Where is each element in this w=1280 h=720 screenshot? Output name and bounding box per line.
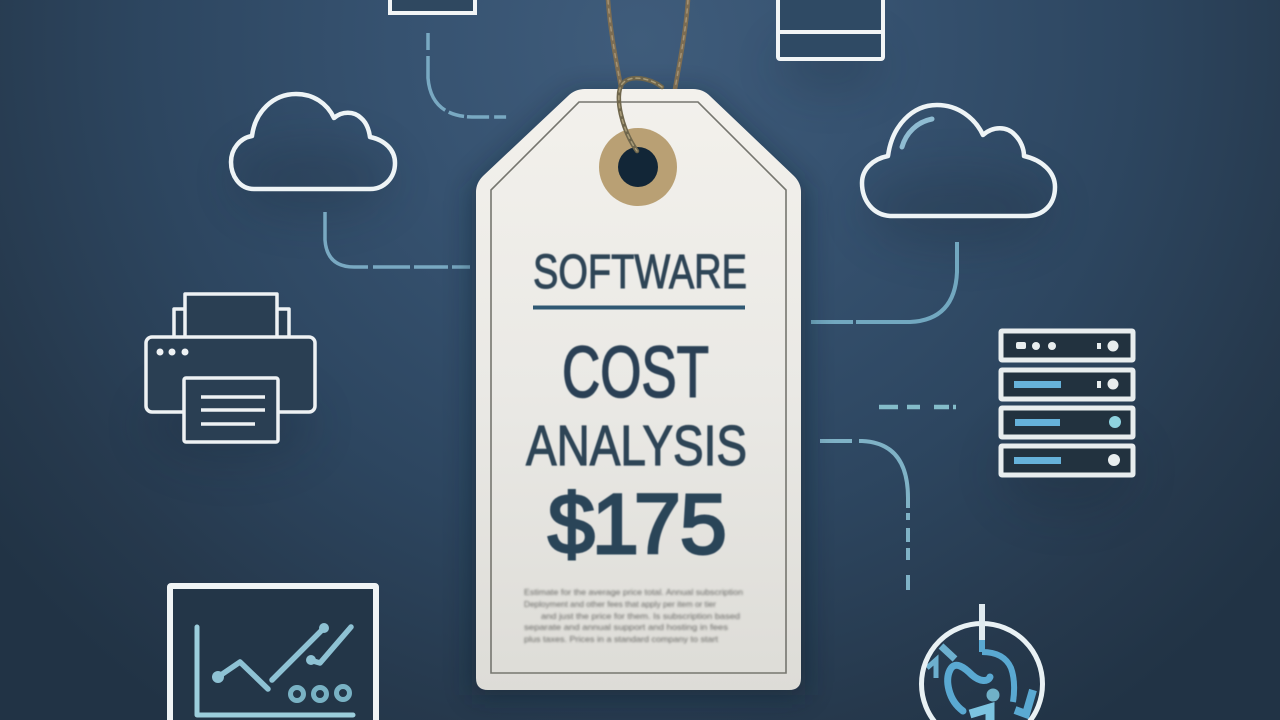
price tag <box>476 78 801 690</box>
icon: server rack <box>1001 331 1133 475</box>
icon: top right device <box>778 0 883 59</box>
icon: right cloud <box>862 105 1055 216</box>
connector: server dash <box>879 405 956 409</box>
icon shadows <box>145 37 1137 515</box>
heading: cost: COST <box>562 333 709 413</box>
fine print: and just the price for them. Is subscription based <box>541 611 740 621</box>
chart ring markers <box>290 686 350 700</box>
fine print: Deployment and other fees that apply per item or tier <box>524 599 716 609</box>
heading underline <box>533 306 745 310</box>
icon: left cloud <box>231 94 395 189</box>
fine print: separate and annual support and hosting in fees <box>524 622 728 632</box>
icon: gear circle <box>922 604 1042 720</box>
string: loop through eyelet <box>619 78 662 151</box>
tag inner border <box>491 102 786 673</box>
chart axes <box>197 627 353 715</box>
connector: right cloud <box>811 242 957 322</box>
connector: top left dashed <box>428 33 510 117</box>
fine print <box>524 587 743 644</box>
chart trend lines <box>218 627 351 689</box>
fine print: Estimate for the average price total. Annual subscription <box>524 587 743 597</box>
icon: top left device <box>390 0 475 13</box>
tag eyelet <box>599 128 677 206</box>
string: back strands <box>608 0 688 89</box>
connector: left cloud dashed <box>325 212 470 267</box>
heading: software: SOFTWARE <box>533 246 747 299</box>
icon: line chart frame <box>170 586 376 720</box>
heading: analysis: ANALYSIS <box>526 414 747 478</box>
fine print: plus taxes. Prices in a standard company to start <box>524 634 719 644</box>
price: $175: $175 <box>548 477 727 571</box>
price tag shadow <box>472 94 805 695</box>
icon: printer <box>146 294 315 442</box>
printer status lights <box>156 348 188 356</box>
connector: lower right dashed <box>820 441 908 590</box>
chart nodes <box>212 623 329 683</box>
tag hole <box>618 147 658 187</box>
